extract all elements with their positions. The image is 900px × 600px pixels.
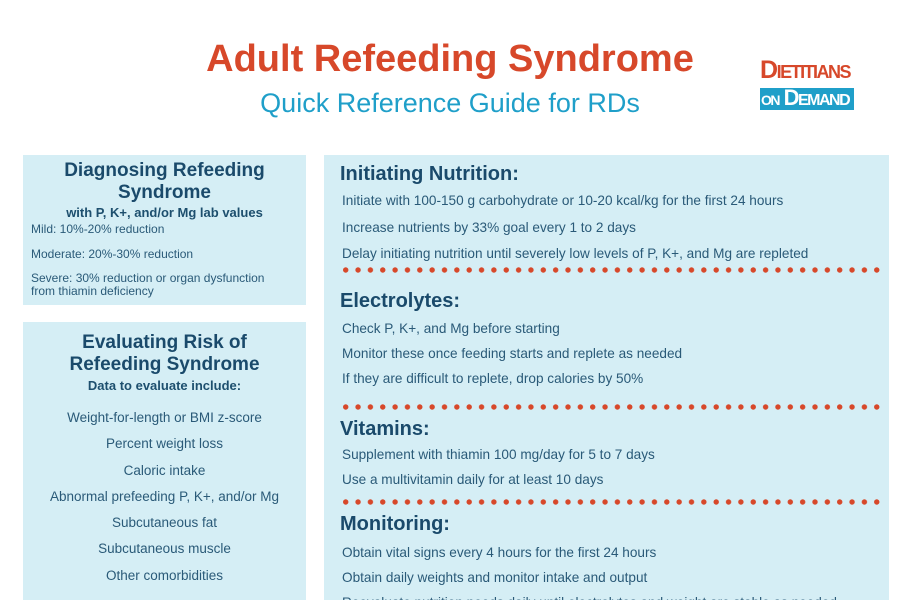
list: risk factors: Other comorbidities	[106, 568, 223, 583]
logo: DIETITIANS	[760, 56, 850, 84]
text block: electrolytes: Monitor these once feeding starts and replete as needed	[342, 346, 682, 361]
panel: main guidance	[324, 155, 889, 600]
text block: vitamins: Supplement with thiamin 100 mg/day for 5 to 7 days	[342, 447, 655, 462]
list: risk factors: Abnormal prefeeding P, K+, and/or Mg	[50, 489, 279, 504]
list: risk factors: Weight-for-length or BMI z-score	[67, 410, 262, 425]
heading: diagnosing: Syndrome	[118, 182, 211, 203]
heading: evaluating: Refeeding Syndrome	[69, 354, 260, 375]
text block: electrolytes: If they are difficult to replete, drop calories by 50%	[342, 371, 643, 386]
heading: evaluating	[69, 332, 260, 375]
list: risk factors: Caloric intake	[124, 463, 205, 478]
heading: diagnosing	[64, 160, 265, 203]
text block: monitoring: Obtain vital signs every 4 hours for the first 24 hours	[342, 545, 656, 560]
text block: initiating	[342, 193, 808, 261]
subheading: Data to evaluate include:	[88, 378, 241, 393]
list: risk factors: Subcutaneous muscle	[98, 541, 231, 556]
logo	[760, 56, 854, 110]
list: risk factors	[50, 410, 279, 583]
text block: initiating: Increase nutrients by 33% goal every 1 to 2 days	[342, 220, 636, 234]
heading: evaluating: Evaluating Risk of	[82, 332, 247, 353]
title: Adult Refeeding Syndrome	[206, 38, 694, 80]
list: risk factors: Subcutaneous fat	[112, 515, 217, 530]
heading: vitamins: Vitamins:	[340, 418, 430, 440]
text block: electrolytes: Check P, K+, and Mg before starting	[342, 321, 560, 336]
text: mild: Mild: 10%-20% reduction	[31, 222, 164, 236]
text block: vitamins	[342, 447, 655, 487]
logo: ON DEMAND	[761, 85, 849, 110]
text: severe: Severe: 30% reduction or organ dysfunction	[31, 271, 264, 285]
heading: diagnosing: Diagnosing Refeeding	[64, 160, 265, 181]
text block: vitamins: Use a multivitamin daily for at least 10 days	[342, 472, 603, 486]
text block: electrolytes	[342, 321, 682, 386]
subheading: with P, K+, and/or Mg lab values	[66, 205, 263, 220]
text: moderate: Moderate: 20%-30% reduction	[31, 247, 193, 261]
text: severe	[31, 271, 264, 298]
text block: monitoring: Obtain daily weights and monitor intake and output	[342, 570, 647, 585]
panel: diagnosing	[23, 155, 306, 305]
text: severe: from thiamin deficiency	[31, 284, 154, 298]
subtitle: Quick Reference Guide for RDs	[260, 88, 640, 118]
heading: initiating nutrition: Initiating Nutrition:	[340, 163, 519, 185]
text block: initiating: Initiate with 100-150 g carbohydrate or 10-20 kcal/kg for the first 24 hours	[342, 193, 783, 208]
text block: initiating: Delay initiating nutrition until severely low levels of P, K+, and Mg are repleted	[342, 246, 808, 261]
heading: electrolytes: Electrolytes:	[340, 290, 460, 312]
heading: monitoring: Monitoring:	[340, 513, 450, 535]
text block: monitoring	[342, 545, 837, 600]
panel: evaluating risk	[23, 322, 306, 600]
list: risk factors: Percent weight loss	[106, 436, 223, 451]
